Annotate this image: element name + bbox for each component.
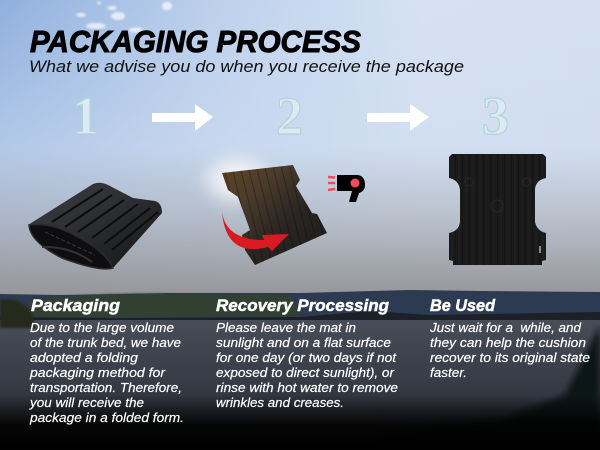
body text <box>429 321 590 380</box>
water <box>0 316 600 450</box>
heading: Recovery Processing <box>216 296 390 315</box>
step number 2: 2 <box>276 86 303 146</box>
body text: Just wait for a while, and <box>429 321 582 335</box>
icon: mat in sunlight <box>222 165 327 265</box>
step number 3: 3 <box>482 86 509 146</box>
arrow 2 to 3 <box>367 104 429 131</box>
body text: of the trunk bed, we have <box>30 336 181 350</box>
body text: exposed to direct sunlight), or <box>216 366 395 380</box>
icon: red curved arrow <box>222 212 289 251</box>
body text <box>29 321 184 425</box>
subtitle: What we advise you do when you receive the package <box>29 57 464 76</box>
tree left <box>0 300 36 328</box>
body text: rinse with hot water to remove <box>216 381 398 395</box>
body text: package in a folded form. <box>29 411 184 425</box>
icon: folded mat <box>28 183 162 269</box>
body text <box>216 321 398 410</box>
body text: they can help the cushion <box>430 336 586 350</box>
body text: wrinkles and creases. <box>216 396 344 410</box>
title: PACKAGING PROCESS <box>30 25 362 59</box>
icon: hair dryer <box>328 175 365 202</box>
icon: unfolded mat <box>449 154 546 265</box>
body text: Due to the large volume <box>30 321 174 335</box>
clouds <box>76 2 172 32</box>
body text: packaging method for <box>29 366 166 380</box>
body text: for one day (or two days if not <box>216 351 397 365</box>
body text: faster. <box>430 366 467 380</box>
foliage right <box>350 325 600 450</box>
dark shore gradient <box>0 395 600 450</box>
mouth of the fold <box>29 224 113 269</box>
body text: adopted a folding <box>30 351 138 365</box>
body text: recover to its original state <box>430 351 590 365</box>
panel: be used <box>429 296 590 380</box>
panel: packaging <box>29 296 184 425</box>
arrow 1 to 2 <box>152 104 213 131</box>
body text: transportation. Therefore, <box>30 381 182 395</box>
body text: sunlight and on a flat surface <box>216 336 391 350</box>
distant hills <box>0 290 600 320</box>
heading: Packaging <box>31 296 121 315</box>
sun glow <box>198 152 278 208</box>
body text: Please leave the mat in <box>216 321 356 335</box>
step number 1: 1 <box>72 86 99 146</box>
heading: Be Used <box>430 296 496 315</box>
body text: you will receive the <box>29 396 144 410</box>
panel: recovery processing <box>216 296 398 410</box>
